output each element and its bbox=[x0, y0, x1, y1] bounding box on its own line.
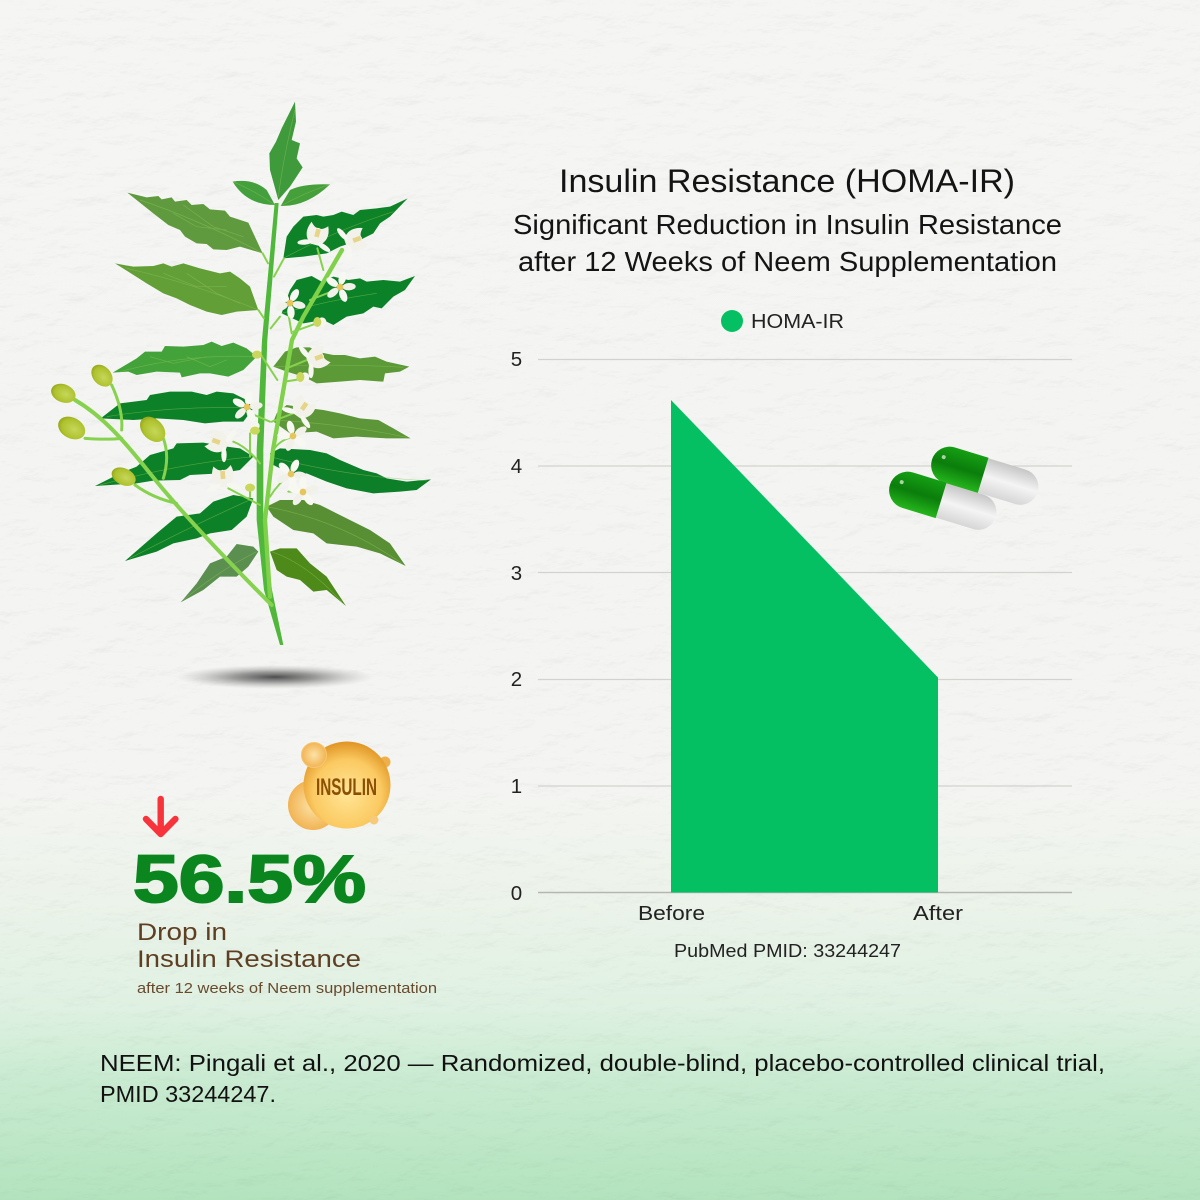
flowers bbox=[201, 219, 372, 507]
icon: red down arrow bbox=[146, 799, 175, 834]
fruits bbox=[48, 360, 170, 490]
ground shadow bbox=[175, 665, 375, 689]
neem plant illustration bbox=[48, 102, 431, 689]
chart heading: after 12 Weeks of Neem Supplementation bbox=[518, 246, 1057, 277]
legend bbox=[721, 310, 844, 333]
chart heading: Significant Reduction in Insulin Resistance bbox=[513, 209, 1062, 240]
y axis labels: 0 bbox=[511, 882, 522, 905]
icon: insulin molecule: INSULIN bbox=[316, 774, 377, 801]
y axis labels: 3 bbox=[511, 562, 522, 585]
x axis labels: After bbox=[913, 902, 963, 925]
stat description: after 12 weeks of Neem supplementation bbox=[137, 980, 437, 997]
legend: HOMA-IR bbox=[751, 311, 844, 333]
area series bbox=[671, 400, 938, 892]
y axis labels: 2 bbox=[511, 668, 522, 691]
chart heading: Insulin Resistance (HOMA-IR) bbox=[559, 163, 1015, 199]
upper leaves bbox=[113, 102, 415, 383]
footer citation: PMID 33244247. bbox=[100, 1081, 276, 1107]
x axis labels bbox=[638, 902, 963, 925]
footer citation: NEEM: Pingali et al., 2020 — Randomized, double-blind, placebo-controlled clinical trial, bbox=[100, 1050, 1105, 1076]
area chart: HOMA-IR before and after bbox=[511, 348, 1072, 925]
y axis labels: 4 bbox=[511, 455, 522, 478]
stat description: Insulin Resistance bbox=[137, 946, 361, 973]
stat: 56.5%: 56.5% bbox=[133, 842, 366, 917]
footer citation bbox=[100, 1050, 1105, 1107]
source note: PubMed PMID: 33244247 bbox=[674, 940, 901, 961]
stat description bbox=[137, 919, 437, 997]
y axis labels: 5 bbox=[511, 348, 522, 371]
icon: capsules bbox=[885, 442, 1043, 535]
chart heading bbox=[513, 163, 1062, 277]
x axis labels: Before bbox=[638, 902, 705, 925]
icon: insulin molecule bbox=[288, 742, 390, 830]
stat description: Drop in bbox=[137, 919, 227, 946]
y axis labels: 1 bbox=[511, 775, 522, 798]
lower leaves bbox=[95, 392, 431, 606]
y axis labels bbox=[511, 348, 522, 905]
stems and branches bbox=[75, 203, 342, 645]
